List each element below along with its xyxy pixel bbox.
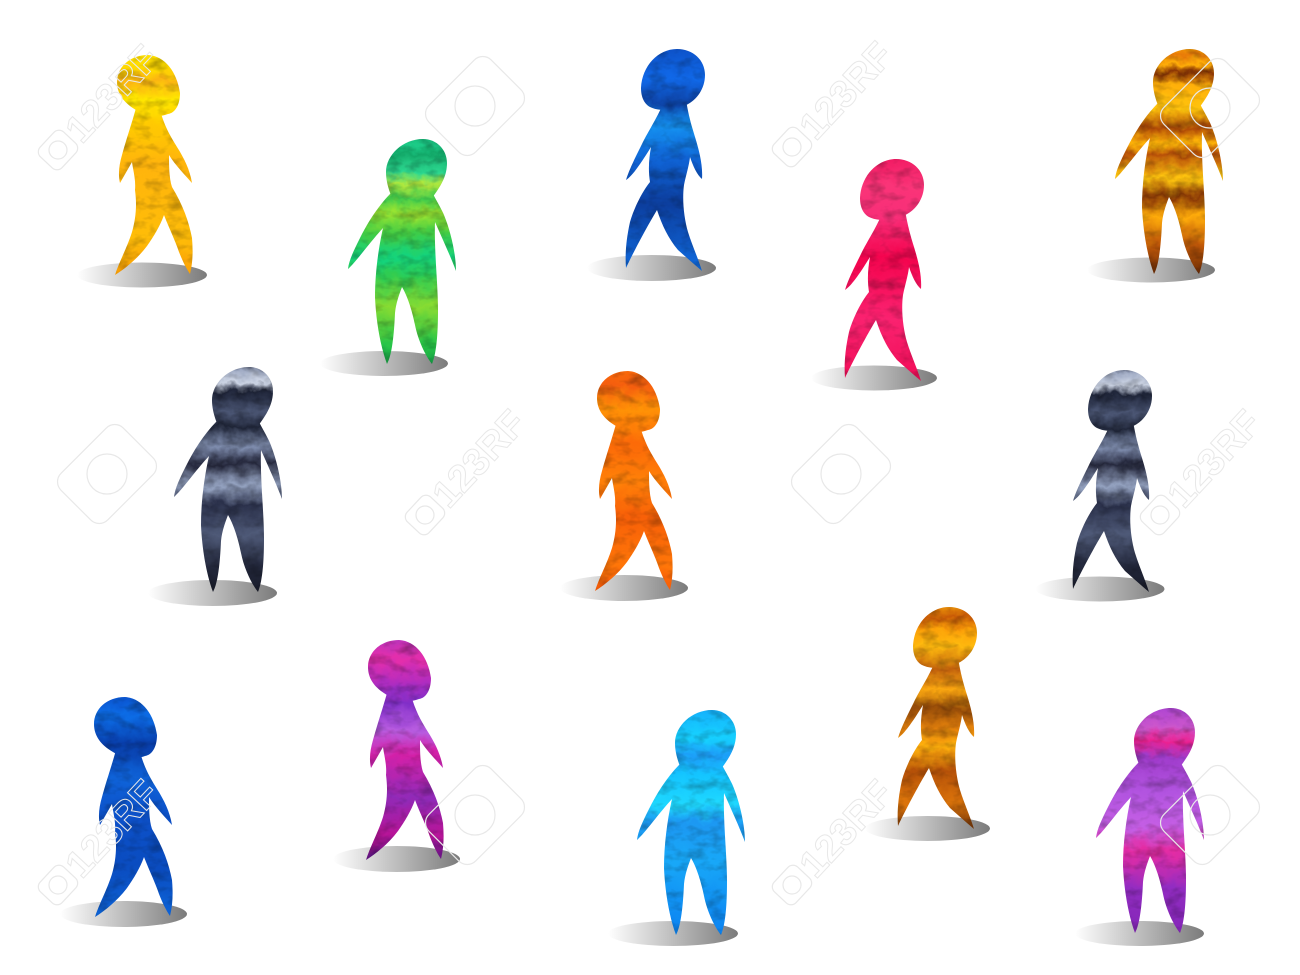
watermark: camera icon bottom right [1156,761,1264,869]
watermark: 123RF bottom left: 123RF [58,773,168,886]
watermark: camera icon top right [1156,54,1264,162]
watermark: 123RF middle right [1135,403,1270,543]
watermark: 123RF middle left: 123RF [425,403,535,516]
watermark: 123RF bottom centre: 123RF [792,773,902,886]
watermark: 123RF bottom left [33,773,168,913]
watermark: 123RF top centre [767,35,902,175]
watermark: 123RF bottom centre [767,773,902,913]
figure: deep blue walking person [68,697,187,927]
watermark: camera icon top [421,52,529,160]
watermark: 123RF middle right: 123RF [1160,403,1270,516]
figure: purple walking person [341,640,460,872]
figure: green standing person [328,139,456,376]
figure: pink walking person [811,150,937,390]
watermark: 123RF top centre: 123RF [792,35,902,148]
watermark: 123RF top left [33,38,168,178]
figure: blue walking person [595,49,716,281]
figure: orange walking person [568,371,688,601]
watermark: camera icon bottom [421,761,529,869]
watermark: camera icon middle left [53,420,161,528]
watermark: 123RF middle left [400,403,535,543]
watermark: camera icon middle [787,420,895,528]
figure: dark grey standing person [156,367,282,606]
figure: dark grey walking person [1036,361,1164,602]
figure: cyan standing person [616,710,745,946]
figure: fiery orange standing person [1095,49,1223,282]
watermark: 123RF top left: 123RF [58,38,168,151]
figure: yellow walking person [85,55,207,288]
figure: amber walking person [865,598,990,841]
figure: violet standing person [1083,708,1204,946]
